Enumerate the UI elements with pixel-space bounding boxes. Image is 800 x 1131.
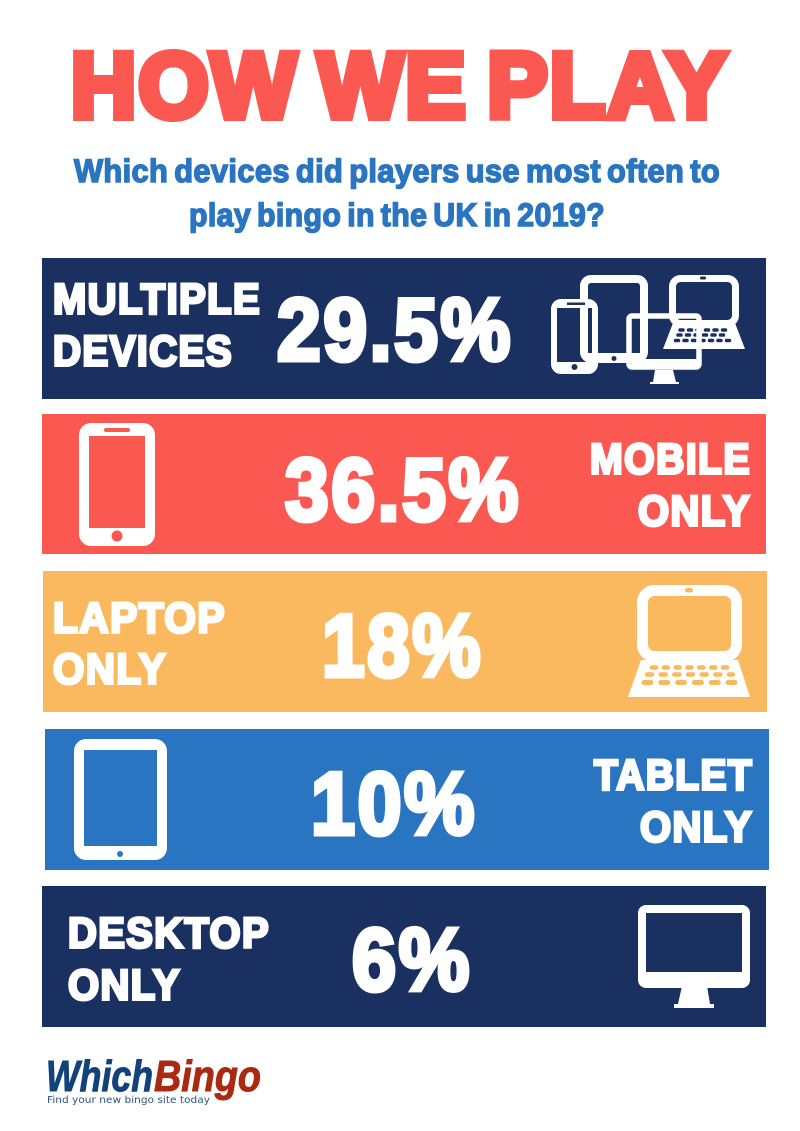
logo: WhichBingo: Which bbox=[46, 1052, 153, 1101]
label: mobile only: MOBILE bbox=[590, 436, 751, 484]
label: multiple devices: MULTIPLE bbox=[53, 276, 261, 324]
label: mobile only: ONLY bbox=[638, 488, 751, 536]
label: tablet only: ONLY bbox=[640, 804, 753, 852]
panel: mobile only bbox=[42, 414, 766, 554]
icon: desktop bbox=[638, 905, 750, 1008]
logo: WhichBingo bbox=[46, 1052, 261, 1106]
panel: laptop only bbox=[43, 571, 767, 712]
label: mobile only bbox=[590, 436, 751, 536]
subtitle bbox=[74, 153, 720, 233]
value: 6%: 6% bbox=[352, 910, 472, 1009]
subtitle: Which devices did players use most often to bbox=[74, 153, 720, 189]
label: desktop only: ONLY bbox=[68, 962, 181, 1010]
label: tablet only: TABLET bbox=[594, 752, 753, 800]
panel: desktop only bbox=[42, 886, 766, 1027]
icon: tablet bbox=[74, 739, 167, 860]
logo: WhichBingo: Bingo bbox=[154, 1052, 261, 1101]
label: multiple devices: DEVICES bbox=[53, 328, 233, 376]
icon: multiple devices bbox=[554, 276, 745, 384]
value: 29.5%: 29.5% bbox=[277, 280, 513, 379]
label: multiple devices bbox=[53, 276, 261, 376]
subtitle: play bingo in the UK in 2019? bbox=[189, 197, 605, 233]
label: laptop only bbox=[53, 594, 226, 694]
title: HOW WE PLAY bbox=[71, 35, 729, 137]
icon: phone bbox=[79, 423, 155, 546]
value: 18%: 18% bbox=[322, 596, 483, 695]
panel: multiple devices bbox=[42, 258, 766, 399]
value: 36.5%: 36.5% bbox=[285, 440, 521, 539]
label: laptop only: ONLY bbox=[53, 646, 167, 694]
value: 10%: 10% bbox=[311, 754, 477, 853]
label: laptop only: LAPTOP bbox=[53, 594, 226, 642]
logo: WhichBingo: Find your new bingo site today bbox=[47, 1095, 210, 1106]
label: desktop only: DESKTOP bbox=[68, 910, 270, 958]
icon: laptop bbox=[628, 588, 750, 697]
panel: tablet only bbox=[45, 729, 769, 870]
label: tablet only bbox=[594, 752, 753, 852]
label: desktop only bbox=[68, 910, 270, 1010]
